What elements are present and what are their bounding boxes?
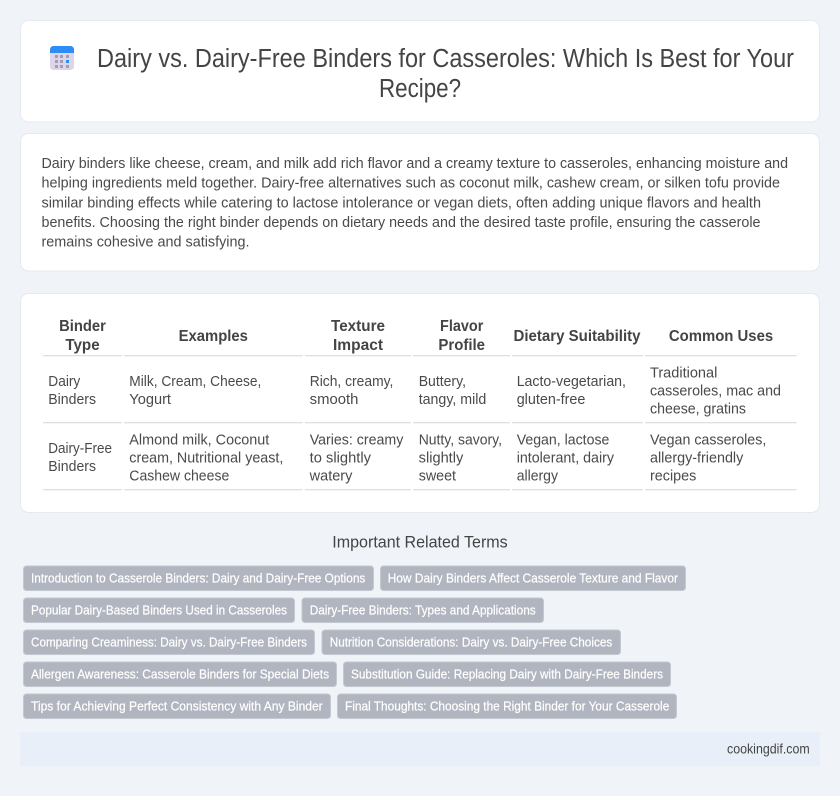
heading: Dairy vs. Dairy-Free Binders for Casseroles: Which Is Best for Your xyxy=(97,45,794,73)
panel: title xyxy=(20,20,820,122)
table row: dairy binders: Milk, Cream, Cheese, xyxy=(129,374,261,390)
table row: dairy-free binders: recipes xyxy=(650,468,696,484)
table header: Common Uses xyxy=(669,328,773,345)
table row: dairy-free binders: Vegan casseroles, xyxy=(650,432,766,448)
table row: dairy-free binders: sweet xyxy=(419,468,456,484)
table header: Profile xyxy=(438,337,485,354)
intro paragraph: remains cohesive and satisfying. xyxy=(42,235,250,251)
tag: Nutrition Considerations: Dairy vs. Dairy-Free Choices xyxy=(330,634,612,649)
table header xyxy=(59,318,773,354)
table row: dairy binders: Rich, creamy, xyxy=(310,374,393,390)
table row: dairy binders: Binders xyxy=(48,392,96,408)
tag xyxy=(24,630,314,654)
table row: dairy-free binders: allergy-friendly xyxy=(650,450,744,466)
tag: Tips for Achieving Perfect Consistency with Any Binder xyxy=(31,698,323,713)
tag xyxy=(24,694,330,718)
icon: calendar xyxy=(50,46,74,70)
heading: Recipe? xyxy=(379,75,461,103)
table row: dairy-free binders: allergy xyxy=(517,468,559,484)
tag xyxy=(344,662,670,686)
tag xyxy=(24,566,374,590)
table row: dairy-free binders: watery xyxy=(309,468,353,484)
table row: dairy binders xyxy=(48,365,781,417)
table header: Type xyxy=(65,337,100,354)
table header: Examples xyxy=(179,328,248,345)
table row: dairy binders: Lacto-vegetarian, xyxy=(517,374,626,390)
table header: Flavor xyxy=(440,318,483,335)
table row: dairy-free binders: Nutty, savory, xyxy=(419,432,502,448)
tag: Introduction to Casserole Binders: Dairy and Dairy-Free Options xyxy=(31,570,365,585)
tag xyxy=(380,566,686,590)
table header: Dietary Suitability xyxy=(514,328,641,345)
tag: Comparing Creaminess: Dairy vs. Dairy-Free Binders xyxy=(31,634,307,649)
table header: Binder xyxy=(59,318,106,335)
table row: dairy binders: casseroles, mac and xyxy=(650,383,781,399)
table row: dairy-free binders: Vegan, lactose xyxy=(517,432,609,448)
table row: dairy binders: Traditional xyxy=(650,365,717,381)
heading xyxy=(97,45,794,103)
intro paragraph: helping ingredients meld together. Dairy-free alternatives such as coconut milk, cashew cream, or silken tofu provide xyxy=(42,176,780,192)
table header: Impact xyxy=(333,337,384,354)
table row: dairy binders: gluten-free xyxy=(517,392,585,408)
table row: dairy binders: tangy, mild xyxy=(419,392,486,408)
table row: dairy-free binders xyxy=(48,432,766,484)
table row: dairy-free binders: Cashew cheese xyxy=(129,468,229,484)
table row: dairy-free binders: slightly xyxy=(419,450,464,466)
table row: dairy binders: cheese, gratins xyxy=(650,401,746,417)
table row: dairy-free binders: intolerant, dairy xyxy=(517,450,615,466)
footer xyxy=(20,732,820,766)
tag xyxy=(24,662,336,686)
panel: introduction xyxy=(20,134,820,271)
intro paragraph xyxy=(42,156,788,251)
tag xyxy=(338,694,676,718)
table row: dairy-free binders: cream, Nutritional yeast, xyxy=(129,450,283,466)
section heading: related terms: Important Related Terms xyxy=(332,534,508,552)
table row: dairy binders: Yogurt xyxy=(129,392,171,408)
tag: Substitution Guide: Replacing Dairy with Dairy-Free Binders xyxy=(351,666,663,681)
table row: dairy-free binders: Binders xyxy=(48,459,96,475)
footer: cookingdif.com xyxy=(727,741,810,756)
intro paragraph: similar binding effects while catering to lactose intolerance or vegan diets, often adding unique flavors and health xyxy=(42,196,761,212)
tag xyxy=(24,598,294,622)
tag: Popular Dairy-Based Binders Used in Casseroles xyxy=(31,602,287,617)
table row: dairy-free binders: Varies: creamy xyxy=(310,432,404,448)
tag: How Dairy Binders Affect Casserole Texture and Flavor xyxy=(388,570,679,585)
tag xyxy=(302,598,544,622)
table header: Texture xyxy=(331,318,385,335)
intro paragraph: benefits. Choosing the right binder depends on dietary needs and the desired taste profile, ensuring the casserole xyxy=(42,215,760,231)
table row: dairy-free binders: Almond milk, Coconut xyxy=(129,432,269,448)
tag: Final Thoughts: Choosing the Right Binder for Your Casserole xyxy=(345,698,669,713)
tag: Allergen Awareness: Casserole Binders for Special Diets xyxy=(31,666,329,681)
table row: dairy binders: Buttery, xyxy=(419,374,466,390)
table row: dairy-free binders: Dairy-Free xyxy=(48,441,112,457)
panel: comparison table xyxy=(20,294,820,512)
table row: dairy-free binders: to slightly xyxy=(310,450,372,466)
tag xyxy=(322,630,620,654)
tag: Dairy-Free Binders: Types and Applications xyxy=(310,602,536,617)
intro paragraph: Dairy binders like cheese, cream, and milk add rich flavor and a creamy texture to casseroles, enhancing moisture and xyxy=(42,156,788,172)
related term tags xyxy=(24,566,686,718)
table row: dairy binders: Dairy xyxy=(48,374,81,390)
table row: dairy binders: smooth xyxy=(310,392,358,408)
